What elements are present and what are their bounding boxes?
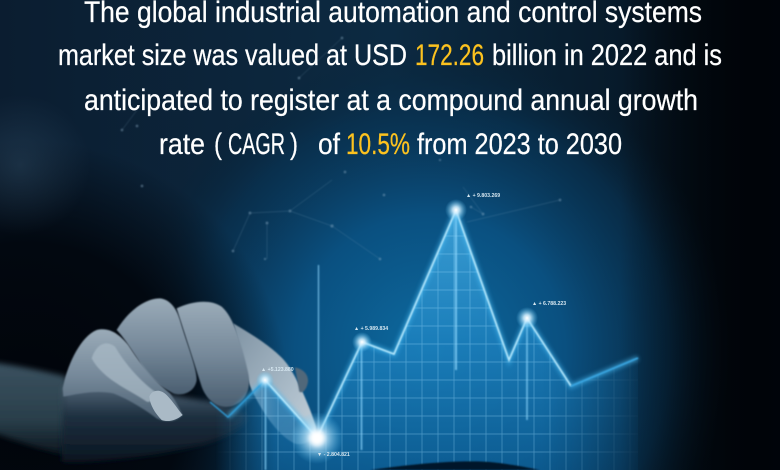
line 4: from 2023 to 2030	[417, 128, 622, 161]
line 4: (	[214, 128, 222, 161]
chart value labels: ▲ + 9.803.269	[466, 193, 500, 199]
chart value labels: ▲ + 5.989.834	[354, 326, 388, 332]
chart value labels: ▲ +5.123.880	[261, 367, 294, 373]
line 4: CAGR	[228, 128, 285, 161]
headline text	[58, 0, 722, 161]
bottom dark mound	[370, 461, 540, 470]
line 4: rate	[159, 128, 205, 161]
thumb highlight	[92, 343, 155, 402]
line chart area with grid	[210, 210, 640, 470]
hand	[0, 298, 316, 462]
grid lines	[210, 210, 640, 470]
chart value labels	[261, 193, 566, 458]
vertical drop lines	[266, 212, 527, 470]
index finger	[233, 323, 316, 444]
line 2: billion in 2022 and is	[492, 39, 722, 72]
line 4	[159, 128, 622, 161]
thumbnail	[149, 391, 183, 421]
chart glow points	[256, 199, 538, 464]
line 4: 10.5%	[346, 128, 410, 161]
line 4: )	[290, 128, 298, 161]
ring finger knuckle	[117, 298, 197, 394]
line 4: of	[318, 128, 341, 161]
chart value labels: ▲ + 6.788.223	[532, 301, 566, 307]
glowing trend line	[210, 210, 638, 438]
palm shadow	[62, 385, 247, 462]
line 3: anticipated to register at a compound annual growth	[84, 84, 698, 117]
line 2	[58, 39, 722, 72]
forearm	[0, 362, 70, 457]
chart value labels: ▼ - 2.804.821	[317, 452, 350, 458]
network constellation lines	[121, 37, 561, 260]
thumb	[63, 329, 183, 421]
line 2: 172.26	[415, 39, 484, 72]
middle finger knuckle	[177, 302, 249, 407]
fingertip edge	[295, 367, 308, 392]
line 2: market size was valued at USD	[58, 39, 407, 72]
